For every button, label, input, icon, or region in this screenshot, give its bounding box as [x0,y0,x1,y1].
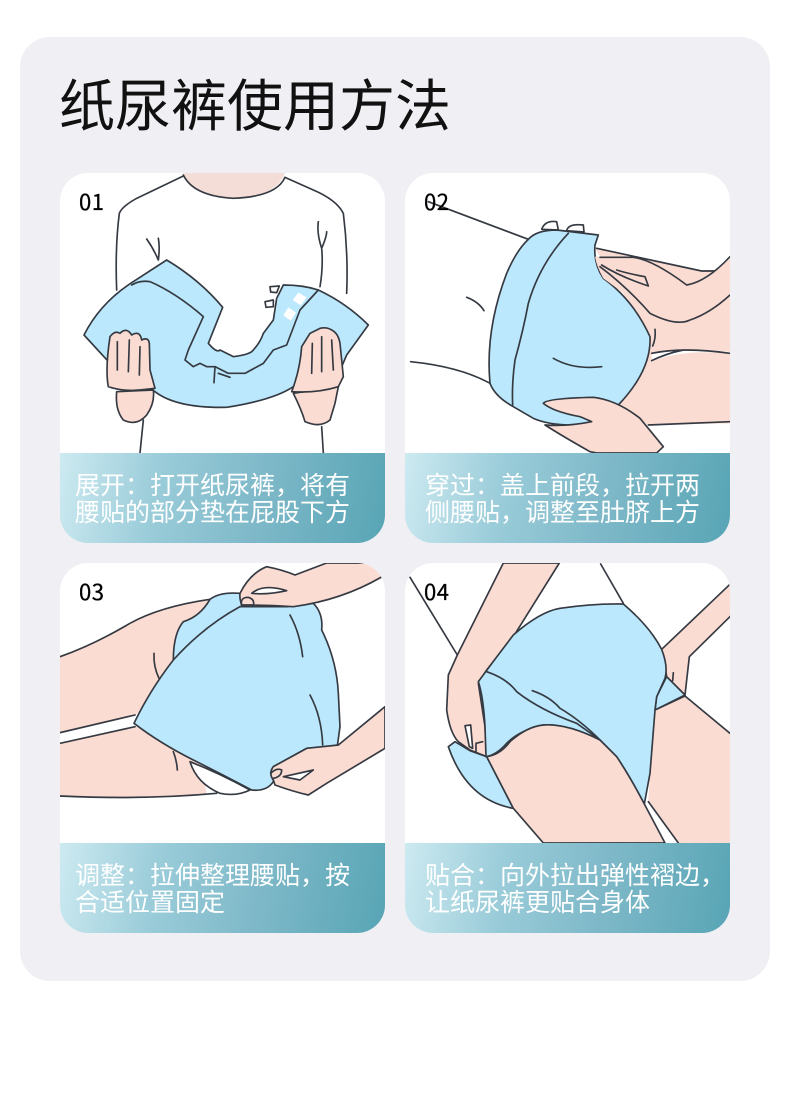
bottom hand [271,707,385,795]
caption: 贴合：向外拉出弹性褶边， [425,856,725,892]
illustration: adjusting the tabs [60,563,385,798]
step number: 04 [424,575,449,607]
step number: 03 [79,575,104,607]
upper hand [595,257,732,322]
panel: step 03 [60,563,385,933]
lower hand [543,397,663,453]
illustration: unfolding the diaper [83,173,370,453]
caption [405,843,730,933]
caption: 侧腰贴，调整至肚脐上方 [425,493,700,529]
panel: step 01 [60,173,385,543]
caption: 穿过：盖上前段，拉开两 [425,466,700,502]
caption [405,453,730,543]
illustration: fitting to the body [409,563,730,843]
panel: step 04 [405,563,730,933]
caption: 合适位置固定 [75,883,225,919]
caption: 展开：打开纸尿裤，将有 [75,466,350,502]
right hand [293,387,338,425]
title: 纸尿裤使用方法 [59,62,451,143]
step number: 02 [424,185,449,217]
caption: 调整：拉伸整理腰贴，按 [75,856,350,892]
caption [60,453,385,543]
caption: 腰贴的部分垫在屁股下方 [75,493,350,529]
top hand [240,563,385,607]
panel: step 02 [405,173,730,543]
caption: 让纸尿裤更贴合身体 [425,883,650,919]
caption [60,843,385,933]
left hand [116,390,154,422]
step number: 01 [79,185,104,217]
illustration: passing through [410,200,730,453]
